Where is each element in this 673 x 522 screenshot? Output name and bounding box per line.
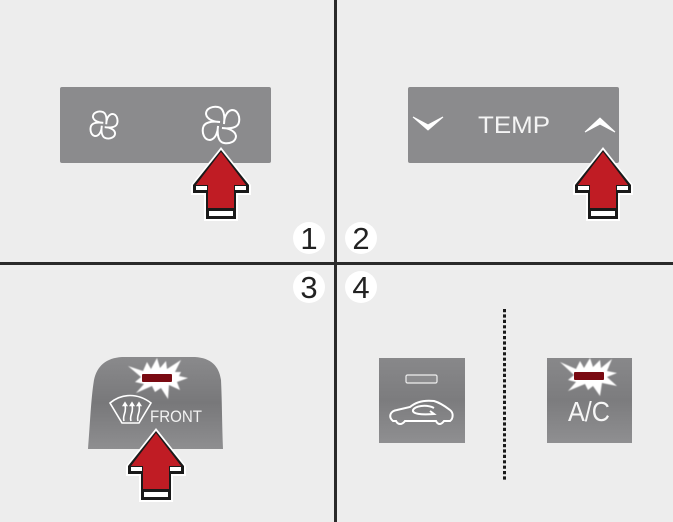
label: FRONT: FRONT bbox=[150, 408, 202, 426]
label: TEMP: TEMP bbox=[478, 112, 550, 139]
arrow: front defrost button bbox=[126, 428, 186, 502]
badge 1: 1 bbox=[300, 221, 318, 256]
panel: fan speed bbox=[60, 87, 271, 163]
arrow: fan button bbox=[191, 147, 251, 221]
indicator light bbox=[574, 372, 604, 380]
badge 3: 3 bbox=[300, 270, 318, 305]
number badges bbox=[293, 221, 377, 305]
label: A/C: A/C bbox=[568, 396, 610, 427]
badge 2: 2 bbox=[352, 221, 370, 256]
icon: windshield defrost bbox=[110, 396, 151, 423]
panel: temperature bbox=[408, 87, 619, 163]
indicator light bbox=[142, 374, 172, 382]
icon: car recirculation bbox=[390, 401, 453, 424]
divider: dotted line bbox=[503, 309, 506, 480]
icon: large fan bbox=[203, 107, 239, 143]
icon: temp down chevron bbox=[413, 117, 443, 130]
panel: recirculation button bbox=[379, 358, 465, 443]
arrow: temp up button bbox=[573, 147, 633, 221]
indicator glow bbox=[128, 358, 188, 399]
panel: front defrost button bbox=[88, 357, 223, 449]
icon: temp up chevron bbox=[585, 118, 615, 132]
panel: A/C button bbox=[547, 358, 632, 443]
badge 4: 4 bbox=[352, 270, 370, 305]
indicator off bbox=[406, 375, 437, 383]
icon: small fan bbox=[90, 111, 118, 139]
indicator glow bbox=[560, 358, 617, 396]
